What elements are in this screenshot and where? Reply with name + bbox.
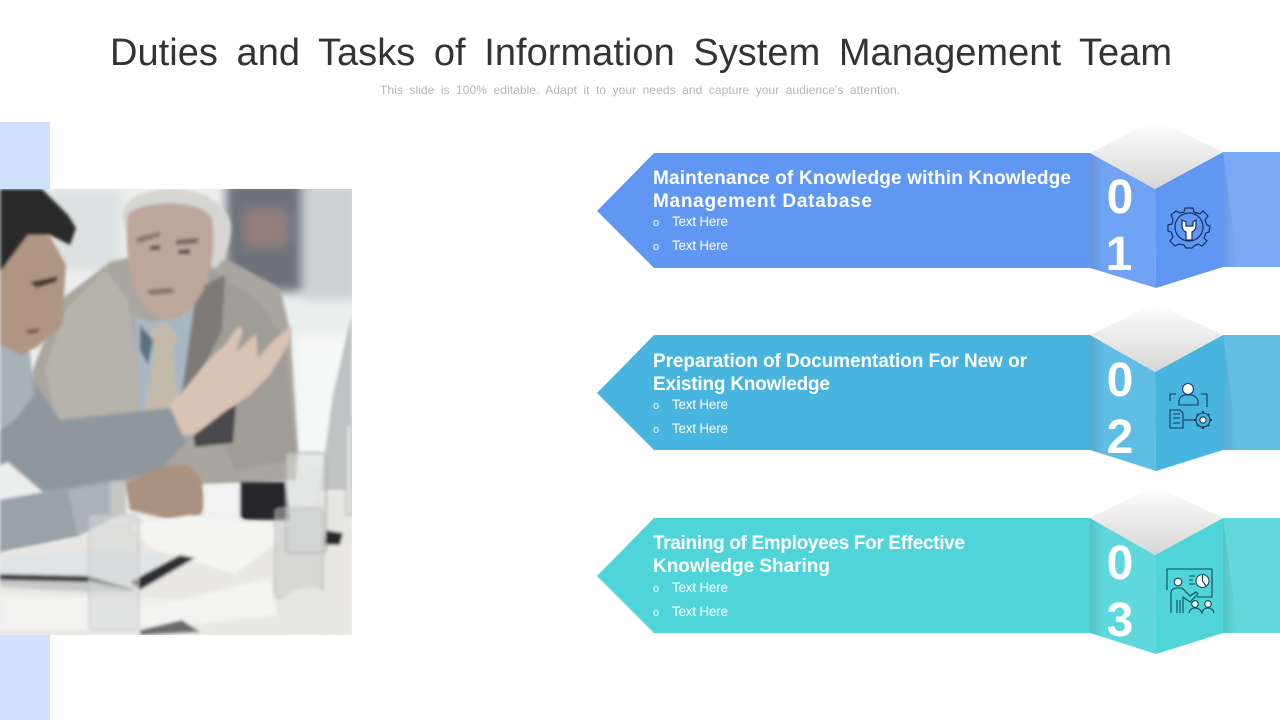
heading 2: Preparation of Documentation For New or bbox=[653, 351, 1028, 372]
heading 1: Management Database bbox=[653, 191, 872, 212]
number 02: 0 bbox=[1107, 354, 1133, 407]
cube right face 3 bbox=[1155, 518, 1223, 654]
cube right face 1 bbox=[1155, 152, 1223, 288]
number 03: 3 bbox=[1107, 594, 1133, 647]
bullets 1: Text Here bbox=[672, 214, 728, 229]
gesturing hand bbox=[170, 325, 292, 435]
cube right face 2 bbox=[1155, 335, 1223, 471]
bullets 3: o bbox=[653, 583, 659, 595]
panel: duty 1 bbox=[597, 120, 1280, 288]
old man hair and head bbox=[122, 189, 231, 268]
arrow banner 3 bbox=[597, 518, 1091, 633]
heading 3: Training of Employees For Effective bbox=[653, 533, 965, 554]
subtitle: This slide is 100% editable. Adapt it to your needs and capture your audience's attention. bbox=[380, 83, 900, 97]
bullets 3: Text Here bbox=[672, 604, 728, 619]
heading 2: Existing Knowledge bbox=[653, 374, 830, 395]
young man hair, face and shirt bbox=[0, 189, 204, 555]
panel: duty 3 bbox=[597, 486, 1280, 654]
cube top face 1 bbox=[1090, 120, 1223, 189]
bullets 1: o bbox=[653, 241, 659, 253]
cube top face 2 bbox=[1090, 303, 1223, 372]
cube left face 3 bbox=[1090, 518, 1156, 654]
arrow banner 2 bbox=[597, 335, 1091, 450]
cube left face 2 bbox=[1090, 335, 1156, 471]
number 02: 2 bbox=[1107, 411, 1133, 464]
bullets 1: Text Here bbox=[672, 238, 728, 253]
arrow banner 1 bbox=[597, 153, 1091, 268]
bullets 2: Text Here bbox=[672, 421, 728, 436]
cube left shade 3 bbox=[1090, 518, 1104, 637]
number 02 bbox=[1107, 354, 1133, 464]
far right person bbox=[320, 313, 352, 495]
table, papers and laptop bbox=[0, 482, 352, 635]
number 03: 0 bbox=[1107, 537, 1133, 590]
watch bbox=[110, 481, 126, 515]
fist bbox=[126, 465, 204, 521]
water glasses bbox=[89, 425, 352, 632]
right band 3 bbox=[1223, 518, 1280, 633]
bullets 1: o bbox=[653, 217, 659, 229]
panel: duty 2 bbox=[597, 303, 1280, 471]
cube left face 1 bbox=[1090, 153, 1156, 288]
number 01: 0 bbox=[1107, 171, 1133, 224]
photo: two businessmen in a meeting bbox=[0, 180, 358, 635]
right band 1 bbox=[1223, 152, 1280, 267]
bullets 3: Text Here bbox=[672, 580, 728, 595]
bullets 2: Text Here bbox=[672, 397, 728, 412]
band shadow 1 bbox=[1223, 152, 1238, 267]
bullets 2 bbox=[653, 397, 728, 436]
decorative side bar bbox=[0, 122, 50, 720]
bullets 1 bbox=[653, 214, 728, 253]
cube left shade 2 bbox=[1090, 335, 1104, 454]
cube top face 3 bbox=[1090, 486, 1223, 555]
band shadow 3 bbox=[1223, 518, 1238, 633]
sleeve and cuff bbox=[0, 484, 94, 555]
icon: person, checklist and gear bbox=[1170, 384, 1212, 429]
bullets 3: o bbox=[653, 607, 659, 619]
band shadow 2 bbox=[1223, 335, 1238, 450]
old man suit bbox=[32, 189, 298, 490]
heading 3: Knowledge Sharing bbox=[653, 556, 830, 577]
heading 1: Maintenance of Knowledge within Knowledge bbox=[653, 168, 1071, 189]
bullets 3 bbox=[653, 580, 728, 619]
bullets 2: o bbox=[653, 424, 659, 436]
cube left shade 1 bbox=[1090, 153, 1104, 272]
number 01: 1 bbox=[1106, 228, 1132, 281]
number 03 bbox=[1107, 537, 1133, 647]
number 01 bbox=[1106, 171, 1133, 281]
icon: presenter with board and audience bbox=[1167, 569, 1214, 613]
bullets 2: o bbox=[653, 400, 659, 412]
right band 2 bbox=[1223, 335, 1280, 450]
title: Duties and Tasks of Information System Management Team bbox=[110, 32, 1172, 74]
icon: gear with wrench bbox=[1168, 208, 1210, 248]
